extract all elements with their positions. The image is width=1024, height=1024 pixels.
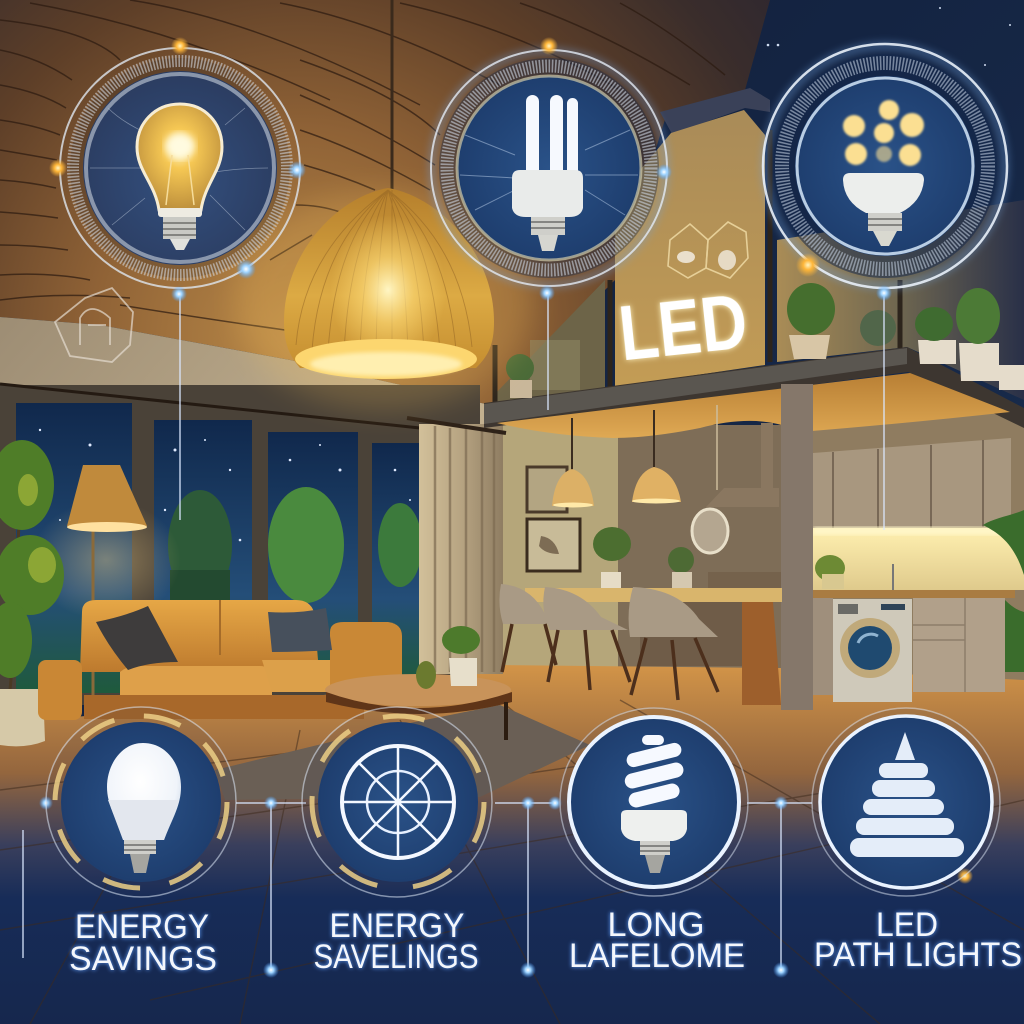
- sofa: [38, 600, 402, 720]
- bottom icon: wheel: [302, 707, 492, 897]
- dining table and chairs: [499, 584, 782, 705]
- label: energy savings: SAVINGS: [69, 940, 217, 978]
- washing machine: [833, 599, 912, 702]
- bottom icon: spiral bulb: [559, 707, 749, 897]
- bottom icon: energy savings bulb: [46, 707, 236, 897]
- label: energy savelings: [314, 907, 478, 976]
- roof beam: [660, 88, 770, 134]
- windows: [0, 384, 422, 693]
- kitchen: [813, 438, 1024, 702]
- pendant lamp: [235, 0, 535, 410]
- label: long lifetime: [569, 906, 745, 975]
- glass gold section: [615, 110, 765, 387]
- connector lines: [23, 295, 884, 968]
- top icon: incandescent bulb: [60, 48, 300, 288]
- wall disc ornament: [692, 509, 728, 553]
- cooker hood: [706, 423, 779, 507]
- label: LED path lights: [814, 906, 1022, 974]
- label: energy savings: ENERGY: [75, 908, 209, 946]
- top icon: CFL bulb: [431, 50, 667, 286]
- loft plants: [506, 283, 1024, 398]
- wooden ceiling: [0, 0, 770, 405]
- small floating icon on wall: [55, 288, 133, 362]
- outdoor trees: [168, 487, 422, 603]
- dining wall art and lamps: [527, 405, 782, 666]
- floor lamp: [31, 465, 181, 700]
- cushions: [96, 606, 178, 670]
- loft structure: [484, 110, 1024, 438]
- loft underside: [497, 373, 1010, 438]
- label: energy savelings: ENERGY: [330, 907, 464, 945]
- left tree plant: [0, 440, 64, 746]
- floating outline icons: [668, 222, 748, 278]
- glass right section: [777, 200, 1024, 400]
- LED sign: LED: [615, 276, 751, 377]
- wall band: [0, 317, 490, 430]
- label: long lifetime: LONG: [608, 906, 704, 944]
- top icon: LED cluster bulb: [763, 44, 1007, 288]
- label: long lifetime: LAFELOME: [569, 937, 745, 975]
- label: energy savelings: SAVELINGS: [314, 938, 478, 976]
- bottom icon: path lights stack: [812, 708, 1000, 896]
- curtains: [407, 418, 506, 674]
- coffee table and rug: [215, 626, 590, 800]
- loft slab: [484, 347, 1024, 428]
- glass left section: [494, 280, 605, 405]
- label: energy savings: [69, 908, 217, 978]
- label: LED path lights: LED: [876, 906, 938, 944]
- support column: [781, 384, 813, 710]
- floor: [0, 665, 1024, 1024]
- kitchen plant: [983, 510, 1024, 672]
